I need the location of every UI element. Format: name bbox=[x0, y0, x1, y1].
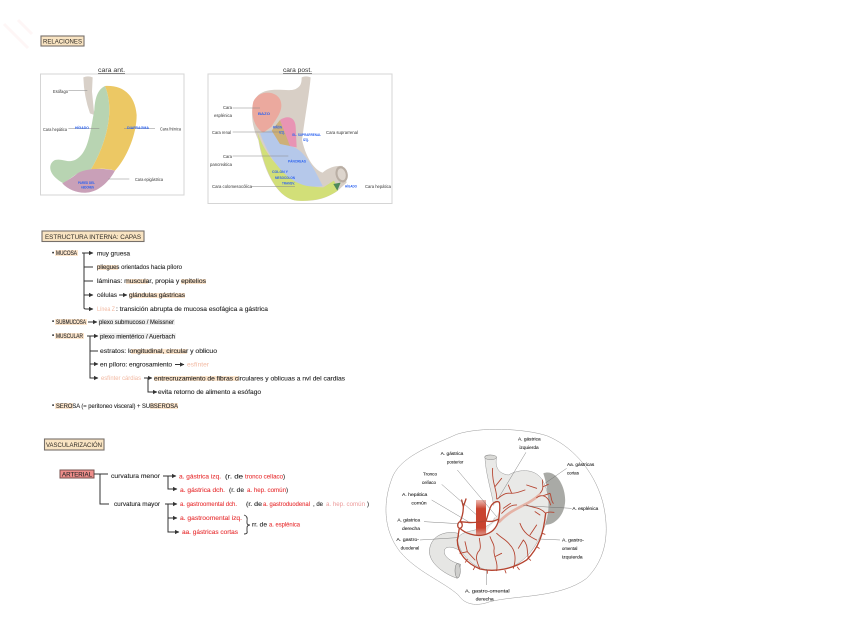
text block: muscular: en píloro: engrosamiento bbox=[100, 362, 173, 368]
artery labels bbox=[396, 437, 599, 603]
branch: curvatura menor: (r. de bbox=[229, 487, 245, 494]
celiac trunk bbox=[476, 500, 486, 535]
label: cara esplénica bbox=[214, 105, 232, 118]
label: cara hepática: Cara hepática bbox=[43, 127, 67, 132]
branch: curvatura mayor: rr. de bbox=[252, 522, 268, 528]
leader lines bbox=[420, 452, 572, 585]
label: arterial: ARTERIAL bbox=[62, 472, 93, 478]
artery labels: A. gástrica bbox=[441, 451, 464, 457]
annotation: pared del abdomen: PARED DEL bbox=[78, 181, 96, 185]
label: cara esplénica: Cara bbox=[223, 105, 232, 110]
annotation: diafragma: DIAFRAGMA bbox=[127, 126, 149, 130]
white openings between vessels bbox=[491, 502, 501, 518]
artery labels: A. gastro- bbox=[562, 538, 584, 544]
caption: cara ant.: cara ant. bbox=[98, 67, 125, 74]
faint decorative marks at top left bbox=[4, 20, 32, 48]
illustration: stomach anterior view bbox=[50, 76, 155, 193]
text block: mucosa: glándulas gástricas bbox=[129, 292, 185, 299]
heading: vascularización: VASCULARIZACIÓN bbox=[46, 440, 102, 449]
annotation: gl. suprarrenal izq.: GL. SUPRARRENAL bbox=[292, 133, 322, 137]
text block: mucosa: : transición abrupta de mucosa esofágica a gástrica bbox=[116, 306, 269, 313]
branch: curvatura menor: (r. de bbox=[225, 474, 244, 480]
branch: curvatura mayor: a. hep. común bbox=[326, 501, 366, 508]
annotation: colon y mesocolon transv.: MESOCOLON bbox=[275, 176, 295, 180]
text block: mucosa: pliegues orientados hacia píloro bbox=[97, 264, 183, 271]
heading: vascularización bbox=[44, 439, 104, 450]
text block: muscular: evita retorno de alimento a esófago bbox=[158, 389, 262, 396]
annotation: páncreas: PÁNCREAS bbox=[288, 158, 306, 164]
text block: muscular: entrecruzamiento de fibras circulares y oblicuas a nvl del cardias bbox=[154, 376, 345, 382]
annotation: colon y mesocolon transv. bbox=[272, 170, 295, 186]
text block: submucosa: • bbox=[52, 318, 54, 326]
text block: muscular: plexo mientérico / Auerbach bbox=[100, 334, 176, 340]
annotation: colon y mesocolon transv.: TRANSV. bbox=[282, 182, 295, 186]
annotation: bazo: BAZO bbox=[258, 112, 270, 116]
annotation: hígado: HÍGADO bbox=[345, 184, 357, 188]
text block: muscular: MUSCULAR bbox=[56, 333, 83, 340]
label: cara colomesocólica: Cara colomesocólica bbox=[212, 184, 252, 189]
branch: curvatura mayor: aa. gástricas cortas bbox=[182, 529, 238, 536]
outline: capas del estómago bbox=[52, 250, 345, 410]
branch: curvatura menor: tronco celíaco bbox=[245, 474, 283, 480]
connector: arterial branches bbox=[94, 474, 109, 504]
label: cara pancreática: Cara bbox=[223, 154, 232, 159]
branch: curvatura menor: a. hep. común bbox=[247, 487, 286, 494]
artery labels: omental bbox=[562, 546, 577, 552]
artery labels: A. gastro-omental bbox=[465, 588, 510, 594]
text block: muscular: esfínter cárdias bbox=[101, 375, 141, 382]
annotation: gl. suprarrenal izq. bbox=[292, 133, 322, 142]
duodenum bbox=[429, 532, 462, 578]
branch: curvatura menor bbox=[111, 473, 288, 494]
branch: curvatura mayor: ) bbox=[367, 501, 369, 508]
artery labels: izquierda bbox=[562, 555, 583, 561]
panel: cara posterior bbox=[208, 67, 392, 204]
annotation: gl. suprarrenal izq.: IZQ. bbox=[303, 138, 309, 142]
branch: curvatura menor: a. gástrica dch. bbox=[180, 487, 225, 494]
label: cara epigástrica: Cara epigástrica bbox=[135, 177, 163, 182]
heading: estructura interna: ESTRUCTURA INTERNA: CAPAS bbox=[45, 234, 142, 241]
heading: estructura interna bbox=[42, 231, 144, 242]
artery labels: A. gástrica bbox=[397, 518, 420, 524]
illustration: arterial supply of the stomach bbox=[386, 429, 606, 604]
annotation: hígado: HÍGADO bbox=[75, 125, 89, 130]
annotation: riñón izq.: IZQ. bbox=[279, 130, 285, 134]
annotation: pared del abdomen bbox=[78, 181, 96, 190]
text block: serosa: SEROSA (= peritoneo visceral) + SUBSEROSA bbox=[56, 403, 179, 410]
branch: curvatura mayor: (r. de bbox=[246, 501, 263, 508]
text block: muscular bbox=[52, 332, 345, 396]
spleen bbox=[543, 473, 565, 525]
caption: cara post.: cara post. bbox=[283, 67, 312, 74]
text block: mucosa: • bbox=[52, 250, 54, 257]
artery labels: común bbox=[411, 500, 427, 506]
branch: curvatura menor: ) bbox=[286, 487, 288, 494]
panel frame: cara anterior bbox=[40, 74, 184, 195]
text block: submucosa: plexo submucoso / Meissner bbox=[99, 319, 174, 326]
illustration: stomach posterior view bbox=[233, 76, 350, 201]
text block: mucosa: Línea Z bbox=[97, 306, 115, 313]
branch: curvatura mayor bbox=[114, 501, 369, 536]
artery labels: posterior bbox=[447, 459, 464, 465]
label: cara esplénica: esplénica bbox=[214, 113, 232, 118]
text block: serosa: • bbox=[52, 402, 54, 410]
panel frame: cara posterior bbox=[208, 74, 392, 204]
branch: curvatura menor: ) bbox=[283, 474, 285, 480]
artery labels: celíaco bbox=[422, 480, 436, 486]
artery labels: duodenal bbox=[401, 545, 419, 551]
branch: curvatura mayor: a. gastroomental izq. bbox=[180, 515, 242, 522]
label: cara pancreática: pancreática bbox=[210, 162, 232, 167]
branch: curvatura mayor: a. gastroomental dch. bbox=[180, 501, 237, 508]
artery labels: izquierda bbox=[519, 445, 539, 451]
text block: mucosa bbox=[52, 250, 269, 313]
branch: curvatura mayor: a. gastroduodenal bbox=[263, 501, 310, 508]
artery labels: A. gastro- bbox=[396, 537, 419, 543]
branch: curvatura mayor: a. esplénica bbox=[269, 522, 300, 528]
diagram: irrigación arterial bbox=[60, 470, 369, 536]
artery labels: A. gástrica bbox=[518, 437, 541, 443]
text block: submucosa: SUBMUCOSA bbox=[56, 319, 87, 326]
heading: relaciones: RELACIONES bbox=[43, 38, 83, 46]
branch: curvatura mayor: , de bbox=[313, 501, 324, 508]
text block: muscular: esfínter bbox=[187, 362, 209, 368]
arteries bbox=[457, 468, 554, 573]
artery labels: cortas bbox=[567, 470, 580, 476]
branch: curvatura menor: a. gástrica izq. bbox=[179, 474, 221, 480]
text block: mucosa: MUCOSA bbox=[56, 250, 78, 257]
annotation: riñón izq.: RIÑÓN bbox=[273, 124, 282, 130]
label: cara renal: Cara renal bbox=[212, 130, 231, 135]
text block: submucosa bbox=[52, 318, 175, 326]
label: esófago: Esófago bbox=[53, 89, 68, 94]
artery labels: Tronco bbox=[423, 471, 437, 477]
text block: mucosa: muy gruesa bbox=[97, 250, 131, 258]
label: cara suprarrenal: Cara suprarrenal bbox=[326, 130, 358, 135]
text block: mucosa: células bbox=[97, 292, 117, 299]
artery labels: A. hepática bbox=[402, 492, 428, 498]
text block: muscular: • bbox=[52, 332, 54, 340]
label: cara pancreática bbox=[210, 154, 232, 167]
artery labels: derecha bbox=[402, 526, 420, 532]
outline blob bbox=[386, 429, 606, 604]
annotation: colon y mesocolon transv.: COLON Y bbox=[272, 170, 288, 174]
branch: curvatura menor: curvatura menor bbox=[111, 473, 160, 480]
annotation: pared del abdomen: ABDOMEN bbox=[81, 186, 94, 190]
panel: cara anterior bbox=[40, 67, 184, 195]
branch: curvatura mayor: curvatura mayor bbox=[114, 501, 160, 508]
artery labels: Aa. gástricas bbox=[567, 462, 595, 468]
label: cara frénica: Cara frénica bbox=[160, 126, 181, 132]
heading: relaciones bbox=[41, 36, 84, 46]
artery labels: derecha bbox=[476, 597, 494, 603]
stomach body bbox=[457, 455, 549, 570]
text block: mucosa: láminas: muscular, propia y epitelios bbox=[97, 278, 206, 285]
text block: muscular: estratos: longitudinal, circular y oblicuo bbox=[100, 348, 218, 355]
label: cara hepática: Cara hepática bbox=[365, 184, 391, 189]
annotation: riñón izq. bbox=[273, 124, 285, 134]
artery labels: A. esplénica bbox=[572, 506, 599, 512]
